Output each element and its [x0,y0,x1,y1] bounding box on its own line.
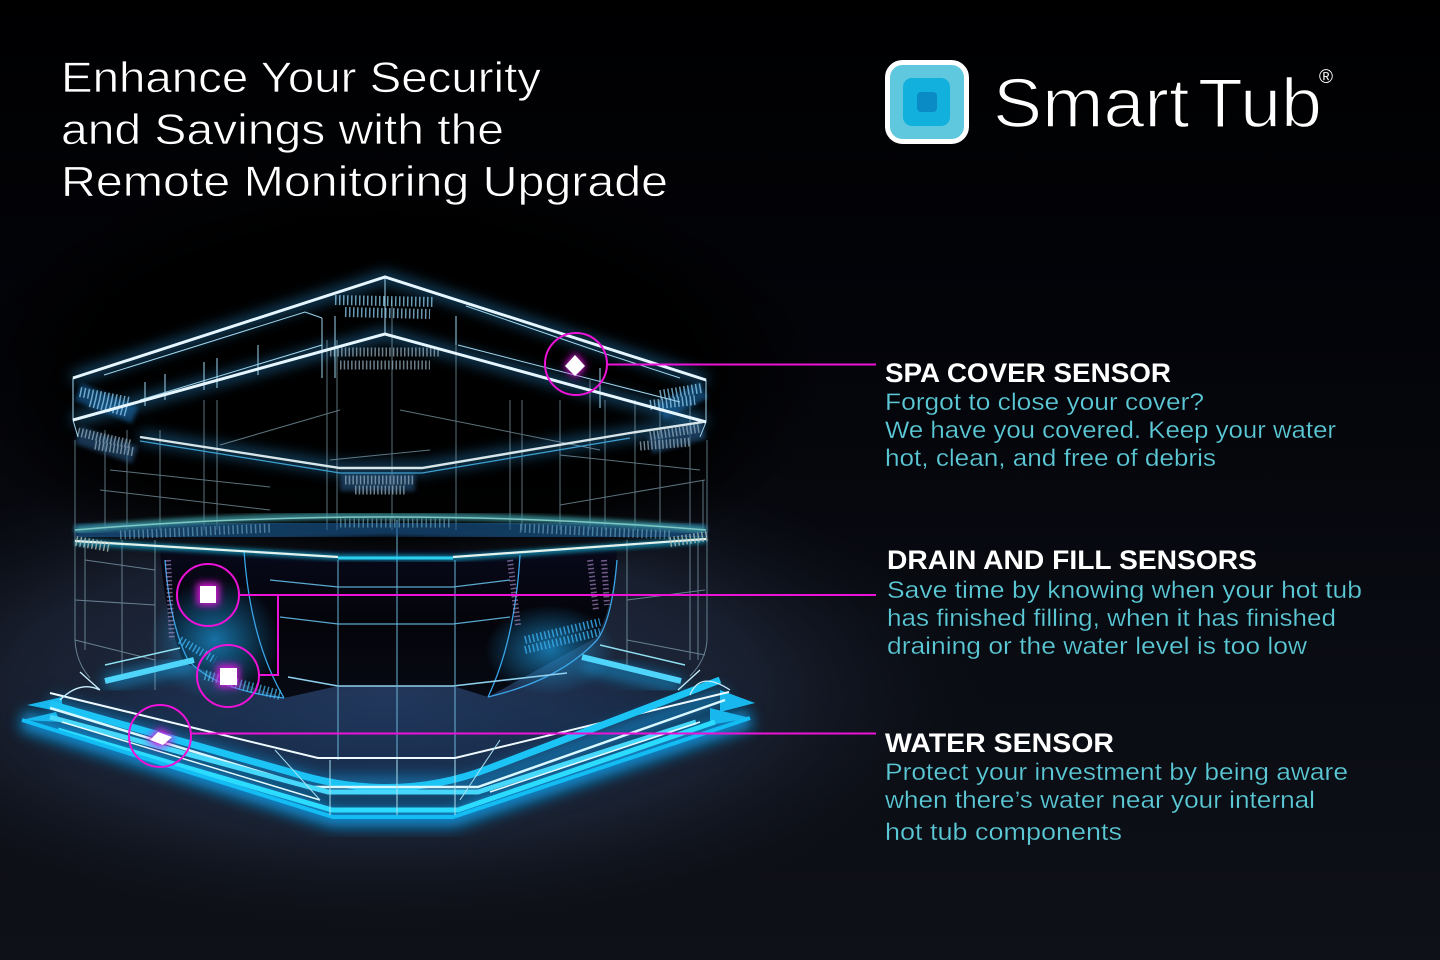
callout: spa cover sensor [885,358,1336,472]
callout: drain and fill sensors: has finished filling, when it has finished [887,605,1336,632]
title [61,54,668,206]
glowing base [22,645,755,817]
title: Remote Monitoring Upgrade [61,158,668,206]
callout: water sensor: WATER SENSOR [885,728,1114,758]
base glow [22,664,750,817]
callout: spa cover sensor: SPA COVER SENSOR [885,358,1171,388]
callout: drain and fill sensors: DRAIN AND FILL SENSORS [887,545,1257,575]
sensor: fill [197,645,259,707]
callout: drain and fill sensors: Save time by knowing when your hot tub [887,577,1362,604]
callout: spa cover sensor: Forgot to close your cover? [885,389,1204,416]
callout: water sensor: when there’s water near your internal [884,787,1315,814]
title: and Savings with the [61,106,504,154]
callout: drain and fill sensors: draining or the water level is too low [887,633,1308,660]
title: Enhance Your Security [61,54,542,102]
callout: water sensor: hot tub components [885,819,1122,846]
sensor: spa cover [545,333,607,395]
callout: spa cover sensor: We have you covered. Keep your water [885,417,1336,444]
tub body wireframe [75,300,707,690]
connector lines [191,364,876,734]
rim [75,516,708,558]
callout: drain and fill sensors [887,545,1362,660]
callout: spa cover sensor: hot, clean, and free of debris [885,445,1216,472]
callout: water sensor [884,728,1348,846]
callout: water sensor: Protect your investment by being aware [885,759,1348,786]
logo: SmartTub [888,62,1333,142]
illustration: wireframe hot tub [22,277,755,817]
bowl [150,520,617,760]
lid glow [73,277,706,468]
wordmark: Smart Tub [993,64,1322,142]
speckled corner details [78,390,704,482]
registered mark: ® [1319,67,1333,88]
sensor: water [129,705,191,767]
sensor: drain [177,564,239,626]
lid [73,277,706,490]
icon: SmartTub concentric squares [888,62,966,142]
